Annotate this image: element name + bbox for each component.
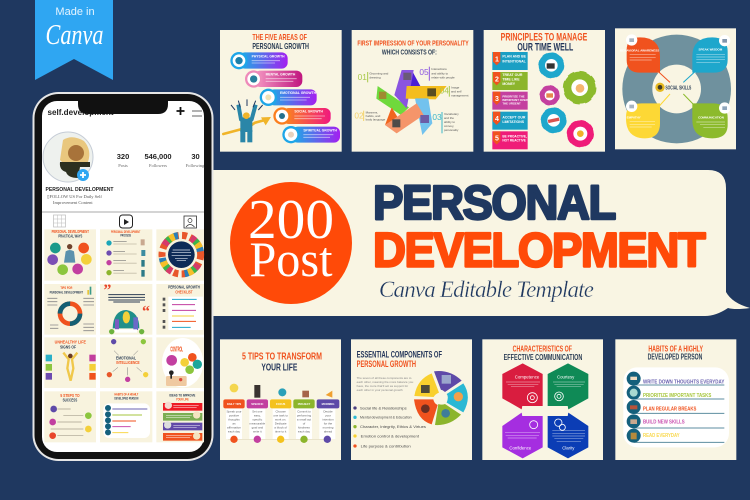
tip columns: FOCUS	[276, 402, 286, 406]
tip columns: write it	[253, 429, 262, 433]
habits list: PRIORITIZE IMPORTANT TASKS	[643, 393, 712, 399]
tip columns: a block of	[274, 425, 287, 429]
post 2: development process: PROCESS	[120, 234, 131, 238]
profile bio	[46, 187, 114, 205]
numbered points: and self	[451, 90, 462, 94]
tip columns: time to it	[275, 429, 286, 433]
panel: habits of a highly developed person	[615, 339, 736, 460]
tip columns: work on.	[275, 417, 286, 421]
tip columns: goal and	[252, 425, 263, 429]
panel: principles to manage our time well	[484, 30, 605, 152]
profile tabs icons	[54, 215, 196, 228]
tip columns: PROJECT	[298, 402, 311, 406]
principles list: ACCEPT OUR	[502, 115, 526, 119]
post 8: emotional intelligence	[107, 339, 148, 382]
profile stats: 30	[191, 152, 200, 161]
growth steps: PHYSICAL GROWTH	[252, 54, 285, 58]
tip columns: specific	[252, 417, 263, 421]
post 7: unhealthy life: UNHEALTHY LIFE	[55, 339, 86, 345]
heading: principles	[501, 32, 587, 53]
profile avatar	[43, 132, 93, 182]
heading: habits: HABITS OF A HIGHLY	[648, 345, 703, 354]
heading: habits: DEVELOPED PERSON	[648, 352, 702, 361]
post 5: quote: “	[142, 304, 150, 321]
numbered points: Manners,	[366, 110, 378, 114]
heading: principles: OUR TIME WELL	[517, 41, 574, 53]
heading: essential components: ESSENTIAL COMPONENTS OF	[357, 349, 442, 359]
tip columns: each day	[298, 429, 311, 433]
principles list: 1	[495, 57, 499, 64]
post 8: emotional intelligence: INTELLIGENCE	[116, 360, 140, 365]
post 4: tips for personal development: PERSONAL DEVELOPMENT	[50, 289, 83, 294]
numbered points	[354, 67, 469, 133]
panel: five tips to transform your life	[220, 339, 341, 460]
badge: made in canva ribbon	[35, 0, 113, 80]
tip columns: morning	[323, 425, 334, 429]
habits list	[623, 367, 729, 447]
heading: five tips: YOUR LIFE	[261, 362, 297, 373]
principles list: INTENTIONAL	[502, 59, 527, 63]
post 11: habits list	[103, 393, 150, 438]
tip columns	[223, 384, 339, 443]
post grid	[44, 229, 204, 442]
tip columns: each day	[228, 429, 241, 433]
phone mockup	[32, 92, 214, 461]
growth steps: SOCIAL GROWTH	[294, 110, 324, 114]
habits list: BUILD NEW SKILLS	[643, 420, 685, 426]
principles list: BE PROACTIVE,	[502, 134, 527, 138]
principles list: IMPORTANT OVER	[502, 98, 528, 102]
profile stats	[117, 152, 205, 168]
post 4: tips for personal development: TIPS FOR	[60, 285, 72, 290]
tip columns: Dedicate	[275, 421, 287, 425]
badge: 200 post circle	[230, 182, 352, 304]
numbered points: ability to	[444, 120, 455, 124]
post 5: quote: ”	[103, 282, 111, 299]
tip columns: kindness	[298, 425, 310, 429]
tip columns: as	[232, 421, 236, 425]
component list: Social life & Relationships	[360, 406, 407, 410]
growth steps: SPIRITUAL GROWTH	[303, 128, 338, 132]
principles list: LIMITATIONS	[502, 120, 525, 124]
heading: principles: PRINCIPLES TO MANAGE	[501, 32, 587, 44]
pie chart	[414, 371, 468, 425]
post 9: control: CONTROL	[170, 346, 183, 353]
numbered points: Interactions	[431, 67, 447, 71]
tip columns: thoughts	[228, 417, 240, 421]
banner: speech bubble panel	[200, 170, 750, 316]
post 1: practical ways: PRACTICAL WAYS	[58, 233, 82, 238]
connector lines	[658, 72, 695, 106]
heading: essential components: PERSONAL GROWTH	[357, 359, 416, 369]
post 9: control	[162, 338, 203, 387]
post 12: ideas to improve: YOUR LIFE	[176, 396, 189, 401]
post 7: unhealthy life: SIGNS OF	[60, 345, 76, 350]
skill bubbles: EMPATHY	[627, 115, 641, 119]
heading: five areas	[252, 32, 309, 51]
principles list: PLAN AND BE	[502, 54, 527, 58]
intro text: each other in your personal growth	[357, 388, 403, 392]
tip columns: Decide	[323, 409, 333, 413]
intro text: The seven of all these components are to	[357, 376, 412, 380]
numbered points: 03	[432, 112, 442, 122]
heading: characteristics	[504, 343, 582, 362]
heading: first impression: FIRST IMPRESSION OF YOUR PERSONALITY	[357, 39, 469, 48]
intro text	[357, 376, 414, 392]
hexagons: Clarity	[562, 445, 575, 450]
tip columns: affirmation	[227, 425, 241, 429]
numbered points: convey,	[444, 124, 454, 128]
badge: 200 post circle: 200	[248, 189, 334, 251]
post 2: development process	[106, 229, 145, 277]
profile stats: 546,000	[144, 152, 172, 161]
skill bubbles	[620, 37, 728, 138]
post 5: quote	[103, 282, 150, 334]
numbered points: and ability to	[431, 71, 448, 75]
post 11: habits list: DEVELOPED PERSON	[114, 397, 139, 401]
tip columns: Speak your	[226, 409, 242, 413]
tip columns: your	[325, 413, 331, 417]
principles list: 2	[495, 76, 499, 83]
numbered points: body language	[366, 118, 386, 122]
numbered points: Image	[451, 86, 460, 90]
numbered points: 02	[354, 111, 364, 121]
hexagons	[502, 363, 588, 458]
skill bubbles: SPEAK WISDOM	[698, 48, 723, 52]
growth steps	[230, 52, 340, 143]
tip columns: MORNING	[322, 402, 334, 406]
principles list: TREAT OUR	[502, 73, 523, 77]
heading: personal: PERSONAL	[373, 176, 616, 229]
badge: made in canva ribbon: Canva	[46, 19, 104, 51]
intro text: have, the more that'll act as support for	[357, 384, 408, 388]
heading: characteristics: CHARACTERISTICS OF	[513, 343, 572, 353]
post 1: practical ways	[47, 229, 92, 275]
numbered points: management	[451, 94, 469, 98]
tip columns: Set one	[252, 409, 263, 413]
hexagons: Courtesy	[557, 374, 575, 379]
profile bio: PERSONAL DEVELOPMENT	[46, 187, 114, 193]
tip columns: for the	[324, 421, 333, 425]
principles list: THE URGENT	[502, 102, 521, 106]
post 10: steps to success: SUCCESS	[63, 398, 77, 403]
tip columns: a small act	[297, 417, 311, 421]
post 8: emotional intelligence: EMOTIONAL	[116, 355, 136, 360]
icon circles	[626, 34, 730, 114]
profile stats: Followers	[149, 163, 167, 168]
tip columns: performing	[297, 413, 311, 417]
notch	[78, 100, 168, 114]
profile stats: 320	[117, 152, 129, 161]
hexagons: Competence	[515, 374, 540, 379]
component list: Life purpose & contribution	[361, 444, 411, 448]
numbered points: 05	[419, 67, 429, 77]
tip columns: SPECIFIC	[251, 402, 264, 406]
growth steps: EMOTIONAL GROWTH	[280, 91, 317, 95]
habits list: READ EVERYDAY	[643, 433, 680, 439]
heading: first impression	[357, 39, 469, 57]
numbered points: personality	[444, 128, 459, 132]
post 4: tips for personal development	[47, 285, 94, 331]
post 1: practical ways: PERSONAL DEVELOPMENT	[52, 229, 89, 234]
tip columns: measurable	[250, 421, 265, 425]
component list: Emotion control & development	[361, 434, 419, 438]
subtitle: canva editable template: Canva Editable Template	[379, 277, 594, 302]
screen	[42, 101, 204, 452]
profile header: self.development	[48, 108, 114, 117]
post 12: ideas to improve	[163, 392, 202, 441]
heading: five areas: THE FIVE AREAS OF	[252, 32, 307, 42]
profile header	[48, 107, 202, 117]
post 10: steps to success: 5 STEPS TO	[60, 393, 80, 398]
principles list: MONEY	[502, 82, 516, 86]
numbered points: habits, and	[366, 114, 381, 118]
post 10: steps to success	[49, 393, 92, 439]
center label: social skills: SOCIAL SKILLS	[665, 85, 691, 91]
profile stats: Posts	[118, 163, 128, 168]
principles list: 5	[495, 136, 499, 143]
principles list: TIME LIKE	[502, 77, 520, 81]
tip columns: Choose	[276, 409, 286, 413]
badge: made in canva ribbon: Made in	[55, 6, 95, 18]
tip columns: DAILY TIPS	[227, 402, 241, 406]
component list: Mental development & Education	[360, 416, 412, 420]
numbered points: 01	[358, 72, 367, 82]
star diagram	[376, 70, 447, 135]
post 12: ideas to improve: IDEAS TO IMPROVE	[169, 392, 196, 397]
tip columns: of	[303, 421, 305, 425]
hexagons: Confidence	[509, 446, 532, 451]
panel: characteristics of effective communication	[482, 339, 603, 460]
tip columns: ahead	[324, 429, 332, 433]
post 11: habits list: HABITS OF A HIGHLY	[114, 393, 139, 397]
numbered points: dressing	[369, 75, 381, 79]
badge: 200 post circle: Post	[250, 231, 333, 287]
phone body	[32, 92, 214, 461]
numbered points: Grooming and	[369, 72, 389, 76]
profile bio: Improvement Content	[53, 200, 93, 205]
component list: Character, Integrity, Ethics & Virtues	[360, 425, 426, 429]
tip columns: positive	[229, 413, 239, 417]
habits list: WRITE DOWN THOUGHTS EVERYDAY	[643, 379, 725, 385]
numbered points: Vocabulary	[444, 112, 459, 116]
post 6: growth checklist	[163, 284, 203, 330]
tip columns: Commit to	[297, 409, 311, 413]
heading: five tips	[242, 352, 322, 373]
panel: first impression of your personality	[352, 30, 473, 152]
habits list: PLAN REGULAR BREAKS	[643, 406, 697, 412]
component list	[353, 406, 426, 448]
post 6: growth checklist: PERSONAL GROWTH	[168, 284, 200, 289]
numbered points: and the	[444, 116, 454, 120]
gears	[540, 54, 595, 146]
heading: first impression: WHICH CONSISTS OF:	[382, 48, 437, 57]
icon: person with rising arrow	[223, 99, 271, 142]
post 7: unhealthy life	[46, 339, 96, 381]
heading: essential components	[357, 349, 442, 369]
numbered points: relate with people	[431, 76, 455, 80]
tip columns: one task to	[273, 413, 288, 417]
heading: habits	[648, 345, 703, 361]
heading: characteristics: EFFECTIVE COMMUNICATION	[504, 352, 582, 362]
skill bubbles: BEHAVIORAL AWARENESS	[620, 48, 659, 52]
principles list: 4	[495, 116, 499, 123]
tip columns: intention	[322, 417, 334, 421]
skill bubbles: COMMUNICATION	[698, 115, 724, 119]
intro text: each other, meaning the more balance you	[357, 380, 414, 384]
panel: social skills	[615, 28, 736, 149]
profile bio: ▯FOLLOW US For Daily Self	[47, 194, 102, 199]
post 6: growth checklist: CHECKLIST	[175, 289, 193, 294]
post 2: development process: PERSONAL DEVELOPMENT	[111, 229, 141, 234]
principles list: NOT REACTIVE	[502, 139, 526, 143]
numbered points: 04	[440, 85, 449, 95]
growth steps: MENTAL GROWTH	[266, 72, 296, 76]
heading: five tips: 5 TIPS TO TRANSFORM	[242, 352, 322, 363]
principles list: PRIORITIZE THE	[502, 94, 525, 98]
panel: five areas of personal growth	[220, 30, 342, 152]
principles list: 3	[495, 96, 499, 103]
profile stats: Following	[186, 163, 205, 168]
principles list	[492, 52, 528, 149]
heading: five areas: PERSONAL GROWTH	[252, 41, 309, 51]
panel: essential components of personal growth	[351, 339, 472, 460]
heading: development: DEVELOPMENT	[373, 223, 706, 277]
tip columns: easy,	[254, 413, 261, 417]
post 3: colour wheel	[162, 235, 201, 274]
ring	[622, 35, 731, 143]
